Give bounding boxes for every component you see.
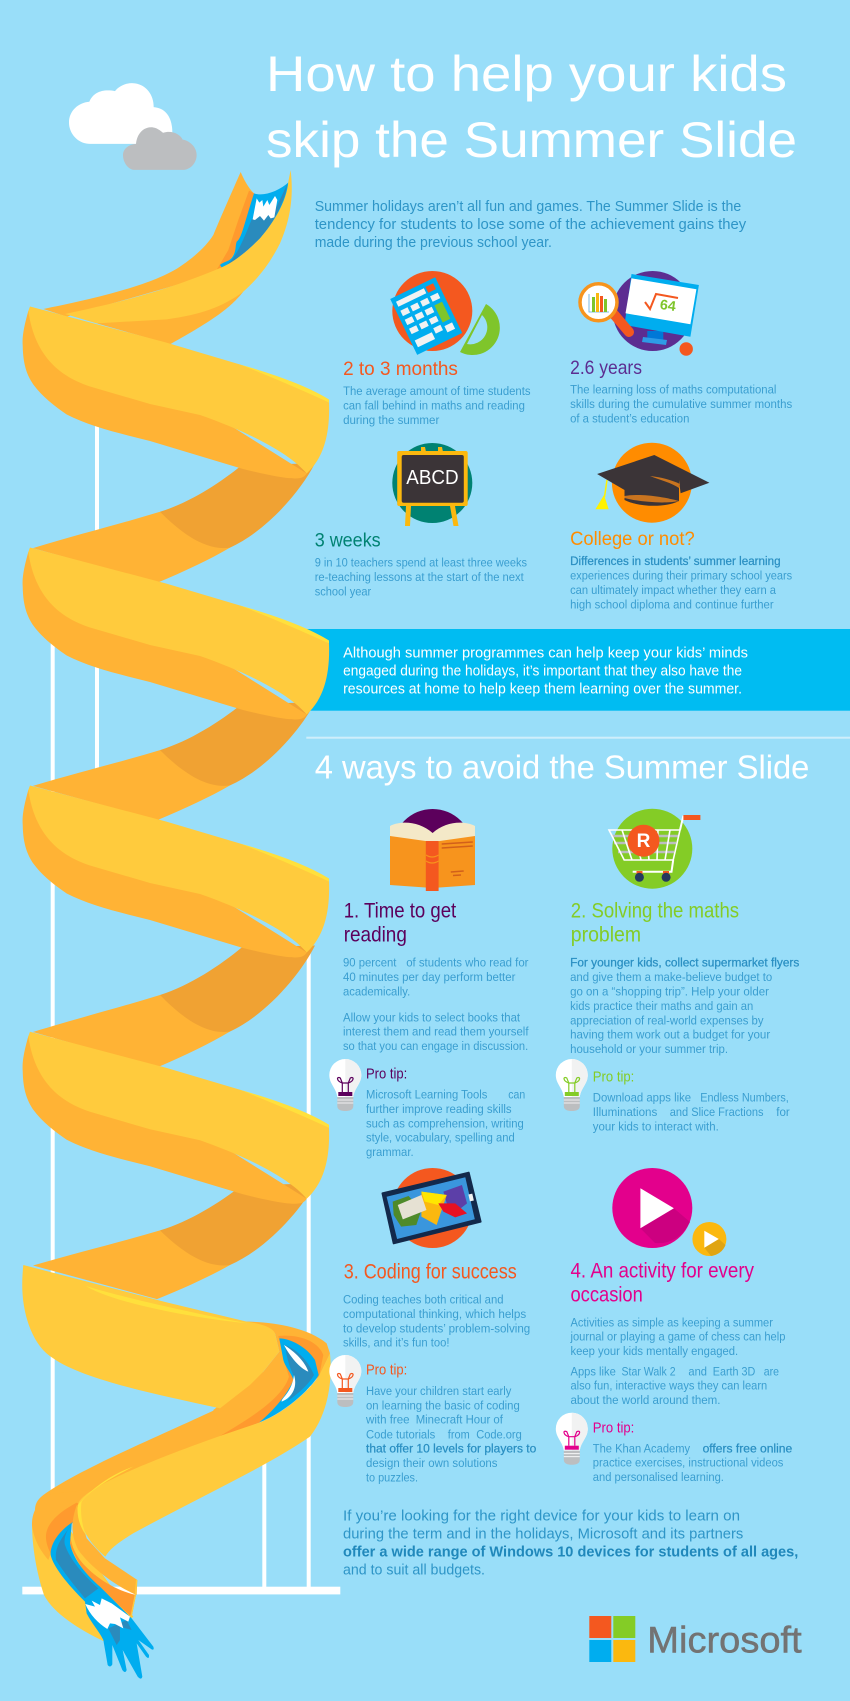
tip 3 heading: 3. Coding for success	[344, 1260, 517, 1283]
tip 3 pro tip: that offer 10 levels for players to	[366, 1442, 537, 1456]
tip 2 body	[570, 956, 799, 1056]
tip 3 pro tip: Pro tip:	[366, 1363, 407, 1379]
tip 1 pro tip: further improve reading skills	[366, 1102, 512, 1116]
tip 1 pro tip: such as comprehension, writing	[366, 1116, 524, 1130]
tip 2 heading: problem	[571, 924, 641, 947]
banner text	[343, 645, 748, 698]
intro text: Summer holidays aren’t all fun and games. The Summer Slide is the	[315, 198, 741, 215]
slide turn 4	[23, 1032, 329, 1299]
tip 3 body: computational thinking, which helps	[343, 1307, 526, 1321]
tip 2 pro tip: your kids to interact with.	[593, 1119, 719, 1133]
banner	[303, 629, 850, 711]
tip 1 heading	[344, 900, 456, 947]
tip 4 body: Activities as simple as keeping a summer	[570, 1315, 773, 1329]
tip 4 body: Earth 3D	[713, 1364, 755, 1378]
tip 2 pro tip: Endless Numbers,	[700, 1091, 789, 1105]
icon: monitor and magnifier: 64	[659, 296, 677, 314]
tip 3 pro tip: with free	[365, 1413, 410, 1427]
tip 3 body: skills, and it’s fun too!	[343, 1336, 450, 1350]
stat: 2 to 3 months	[343, 358, 530, 427]
tip 4 body: journal or playing a game of chess can help	[570, 1330, 786, 1344]
tip 3 pro tip: Code.org	[476, 1427, 522, 1441]
tip 1 pro tip: grammar.	[366, 1145, 414, 1159]
icon: grey cloud	[123, 127, 197, 170]
stat: 2.6 years: of a student’s education	[570, 411, 689, 425]
icon: calculator and protractor	[390, 271, 500, 355]
Microsoft logo	[589, 1616, 802, 1662]
tip 4 heading: 4. An activity for every	[570, 1259, 754, 1282]
tip 4 pro tip: Pro tip:	[593, 1420, 634, 1436]
tip 4 heading: occasion	[570, 1283, 643, 1306]
intro text: made during the previous school year.	[315, 234, 552, 251]
title: skip the Summer Slide	[266, 112, 797, 168]
stat: 2 to 3 months: during the summer	[343, 413, 439, 427]
slide turn 3	[23, 786, 329, 1068]
icon: bulb green	[556, 1059, 588, 1111]
stat: 2.6 years: The learning loss of maths computational	[570, 383, 776, 397]
slide top entrance	[43, 170, 292, 344]
tip 1 heading: 1. Time to get	[344, 900, 456, 923]
tip 2 body: For younger kids, collect supermarket flyers	[570, 956, 799, 970]
closing text: offer a wide range of Windows 10 devices for students of all ages,	[343, 1544, 798, 1561]
closing text: If you’re looking for the right device for your kids to learn on	[343, 1508, 740, 1525]
tip 3 pro tip: to puzzles.	[366, 1470, 418, 1484]
stat: 3 weeks: school year	[315, 585, 371, 599]
tip 2 heading: 2. Solving the maths	[571, 900, 739, 923]
stat: college or not: can ultimately impact whether they earn a	[570, 583, 776, 597]
icon: tablet	[382, 1168, 481, 1248]
tip 1 body: so that you can engage in discussion.	[343, 1039, 528, 1053]
tip 1 pro tip: Pro tip:	[366, 1066, 407, 1082]
banner text: resources at home to help keep them learning over the summer.	[343, 681, 742, 698]
tip 4 pro tip: and personalised learning.	[593, 1470, 724, 1484]
icon: shopping cart	[609, 809, 700, 889]
tip 3 pro tip: Have your children start early	[366, 1384, 512, 1398]
stat: 3 weeks	[315, 530, 527, 599]
stat: 2.6 years	[570, 357, 792, 425]
tip 1 body: of students who read for	[406, 956, 528, 970]
stat: college or not: experiences during their primary school years	[570, 569, 792, 583]
tip 1 pro tip: can	[508, 1088, 525, 1102]
tip 2 pro tip	[593, 1070, 790, 1133]
stat: 2 to 3 months: The average amount of time students	[343, 384, 530, 398]
title: How to help your kids	[266, 46, 787, 102]
closing text	[343, 1508, 798, 1579]
icon: play buttons	[612, 1168, 726, 1256]
stat: 2.6 years: skills during the cumulative summer months	[570, 397, 792, 411]
stat: 3 weeks: re-teaching lessons at the start of the next	[315, 570, 524, 584]
stat: 3 weeks: 9 in 10 teachers spend at least three weeks	[315, 556, 527, 570]
icon: bulb orange	[329, 1355, 361, 1407]
tip 1 body: 90 percent	[343, 956, 397, 970]
tip 1 pro tip: Microsoft Learning Tools	[366, 1088, 487, 1102]
tip 3 body: to develop students’ problem-solving	[343, 1321, 530, 1335]
tip 3 pro tip: on learning the basic of coding	[366, 1398, 520, 1412]
stat: college or not: high school diploma and continue further	[570, 597, 774, 611]
tip 2 body: and give them a make-believe budget to	[570, 970, 772, 984]
stat: 2.6 years: 2.6 years	[570, 357, 642, 379]
tip 3 pro tip	[365, 1363, 537, 1484]
icon: monitor and magnifier	[580, 271, 699, 356]
tip 3 pro tip: Minecraft Hour of	[416, 1413, 503, 1427]
tip 1 pro tip	[366, 1066, 525, 1159]
tip 1 body: academically.	[343, 984, 410, 998]
tip 4 body: and	[688, 1364, 707, 1378]
Microsoft logo: Microsoft	[647, 1620, 802, 1661]
tip 4 heading	[570, 1259, 754, 1306]
tip 2 pro tip: for	[776, 1105, 790, 1119]
stat: college or not: College or not?	[570, 528, 695, 550]
support poles and base	[22, 400, 340, 1594]
icon: shopping cart: R	[637, 831, 651, 852]
slide turn 1	[23, 306, 329, 583]
tip 1 heading: reading	[344, 924, 407, 947]
stat: 2 to 3 months: can fall behind in maths and reading	[343, 398, 525, 412]
tip 1 body: interest them and read them yourself	[343, 1025, 529, 1039]
tip 3 pro tip: design their own solutions	[366, 1456, 498, 1470]
intro text	[315, 198, 747, 251]
tip 1 body: Allow your kids to select books that	[343, 1010, 521, 1024]
tip 4 pro tip	[593, 1420, 792, 1484]
slide turn 2	[23, 548, 329, 820]
tip 2 pro tip: Download apps like	[593, 1091, 691, 1105]
tip 4 body: are	[764, 1364, 779, 1378]
tip 3 pro tip: from	[448, 1427, 470, 1441]
tip 1 body: 40 minutes per day perform better	[343, 970, 515, 984]
icon: chalkboard	[392, 443, 472, 526]
tip 3 pro tip: Code tutorials	[366, 1427, 435, 1441]
tip 2 heading	[571, 900, 739, 947]
tip 4 body: keep your kids mentally engaged.	[570, 1344, 738, 1358]
tip 4 body	[570, 1315, 786, 1407]
icon: white cloud	[69, 83, 172, 144]
icon: chalkboard: ABCD	[406, 467, 459, 489]
spiral slide	[22, 170, 331, 1679]
tip 1 body	[343, 956, 529, 1053]
tip 3 body	[343, 1293, 530, 1350]
tip 2 pro tip: Illuminations	[593, 1105, 657, 1119]
tip 4 body: also fun, interactive ways they can learn	[570, 1379, 767, 1393]
tip 2 body: household or your summer trip.	[570, 1042, 728, 1056]
icon: bulb magenta	[556, 1413, 588, 1465]
tip 4 pro tip: offers free online	[703, 1441, 792, 1455]
icon: book	[390, 809, 475, 891]
tip 4 pro tip: The Khan Academy	[593, 1441, 691, 1455]
banner text: engaged during the holidays, it’s important that they also have the	[343, 663, 742, 680]
tip 1 pro tip: style, vocabulary, spelling and	[366, 1131, 515, 1145]
tip 3 body: Coding teaches both critical and	[343, 1293, 504, 1307]
tip 4 pro tip: practice exercises, instructional videos	[593, 1456, 783, 1470]
stat: college or not: Differences in students’ summer learning	[570, 554, 781, 568]
title	[266, 46, 797, 168]
closing text: and to suit all budgets.	[343, 1562, 485, 1579]
banner text: Although summer programmes can help keep your kids’ minds	[343, 645, 748, 662]
icon: graduation cap	[595, 443, 709, 523]
icon: bulb purple	[329, 1059, 361, 1111]
intro text: tendency for students to lose some of the achievement gains they	[315, 216, 747, 233]
section heading: 4 ways to avoid the Summer Slide	[315, 748, 809, 785]
stat: college or not	[570, 528, 792, 611]
closing text: during the term and in the holidays, Microsoft and its partners	[343, 1526, 743, 1543]
tip 2 pro tip: and Slice Fractions	[670, 1105, 764, 1119]
tip 2 body: go on a “shopping trip”. Help your older	[570, 984, 769, 998]
tip 2 pro tip: Pro tip:	[593, 1070, 634, 1086]
tip 2 body: having them work out a budget for your	[570, 1028, 770, 1042]
stat: 3 weeks: 3 weeks	[315, 530, 381, 552]
stat: 2 to 3 months: 2 to 3 months	[343, 358, 458, 380]
tip 4 body: about the world around them.	[570, 1393, 720, 1407]
slide bottom exit with water	[22, 1265, 331, 1679]
tip 4 body: Apps like	[570, 1364, 616, 1378]
tip 4 body: Star Walk 2	[622, 1364, 676, 1378]
tip 2 body: appreciation of real-world expenses by	[570, 1013, 764, 1027]
tip 2 body: kids practice their maths and gain an	[570, 999, 753, 1013]
